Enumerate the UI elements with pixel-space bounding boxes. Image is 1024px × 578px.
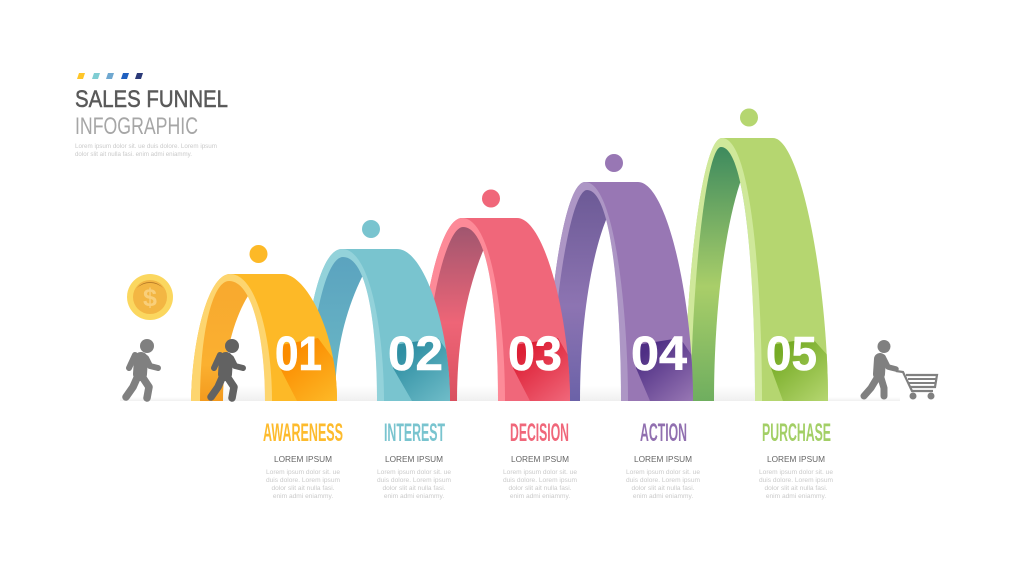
dot [605,154,623,172]
description [266,469,341,500]
description: Lorem ipsum dolor sit. ue [377,469,451,476]
column: interest [377,419,452,500]
description: dolor slit ait nulla fasi. [508,485,572,492]
dot [482,190,500,208]
description: dolor slit ait nulla fasi. [764,485,828,492]
column: action [626,419,701,500]
column: awareness [263,419,343,500]
description: Lorem ipsum dolor sit. ue [759,469,833,476]
description: duis dolore. Lorem ipsum [377,477,452,484]
number 02: 02 [388,328,443,381]
colour key squares [77,73,143,79]
icon: person with shopping cart [864,340,937,400]
column: purchase [759,419,834,500]
subheading: LOREM IPSUM [385,454,443,464]
icon: coin: $ [143,284,157,312]
description: Lorem ipsum dolor sit. ue [266,469,340,476]
number 01: 01 [275,328,322,381]
dot [362,220,380,238]
icon: walking person [126,339,158,398]
description: enim admi eniammy. [384,493,444,500]
intro text: dolor slit ait nulla fasi. enim admi eniammy. [75,151,192,158]
arch 05 purchase [685,108,830,401]
arch 02 interest [303,220,452,401]
ground shadow line [120,397,900,401]
arch 03 decision [418,190,572,401]
description: Lorem ipsum dolor sit. ue [626,469,700,476]
number 04: 04 [631,328,687,381]
description: enim admi eniammy. [633,493,693,500]
subheading: LOREM IPSUM [511,454,569,464]
description [503,469,578,500]
intro text: Lorem ipsum dolor sit. ue duis dolore. Lorem ipsum [75,143,217,150]
subheading: INFOGRAPHIC [75,113,198,140]
description: dolor slit ait nulla fasi. [631,485,695,492]
description: Lorem ipsum dolor sit. ue [503,469,577,476]
title block [75,73,228,158]
arch 01 awareness [191,245,338,401]
intro text [75,143,217,158]
description: dolor slit ait nulla fasi. [271,485,335,492]
arch 04 action [546,154,695,401]
description: duis dolore. Lorem ipsum [503,477,578,484]
column: action: ACTION [640,419,687,447]
icon: coin [127,274,173,320]
description: dolor slit ait nulla fasi. [382,485,446,492]
description: duis dolore. Lorem ipsum [759,477,834,484]
column: purchase: PURCHASE [762,419,831,447]
description: enim admi eniammy. [273,493,333,500]
description [759,469,834,500]
column: interest: INTEREST [384,419,445,447]
subheading: LOREM IPSUM [767,454,825,464]
number 03: 03 [508,328,562,381]
dot [250,245,268,263]
description: duis dolore. Lorem ipsum [626,477,701,484]
description: duis dolore. Lorem ipsum [266,477,341,484]
heading: SALES FUNNEL [75,86,228,113]
label: AWARENESS [263,419,343,447]
description: enim admi eniammy. [510,493,570,500]
column: decision: DECISION [510,419,569,447]
dot [740,108,758,126]
description [626,469,701,500]
number 05: 05 [766,328,817,381]
subheading: LOREM IPSUM [274,454,332,464]
subheading: LOREM IPSUM [634,454,692,464]
description: enim admi eniammy. [766,493,826,500]
description [377,469,452,500]
column: decision [503,419,578,500]
icon: person inside arch [211,339,243,398]
